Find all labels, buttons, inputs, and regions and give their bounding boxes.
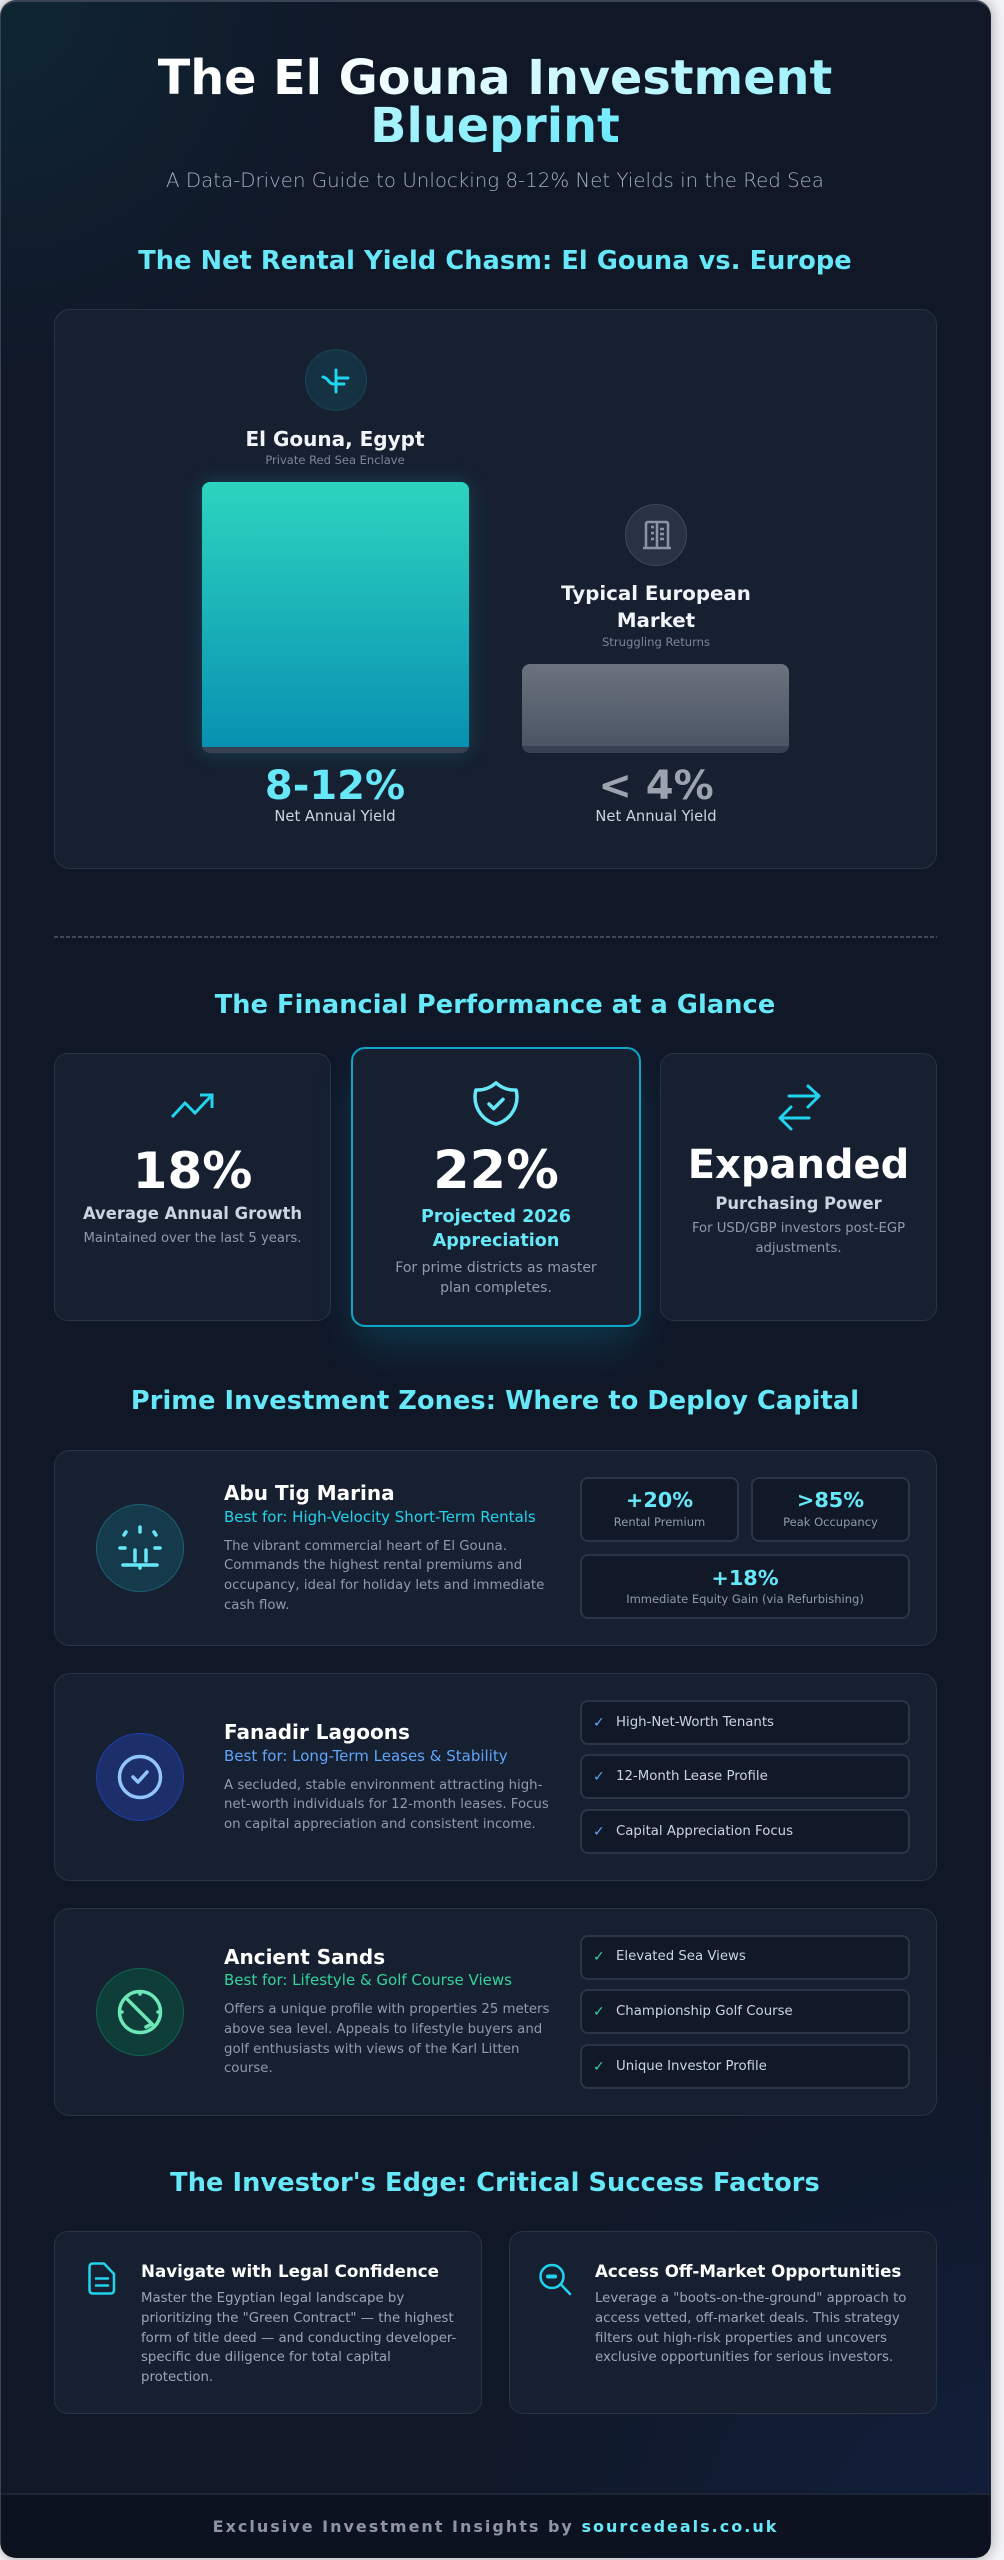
text: off-market: Leverage a "boots-on-the-ground" approach to: [595, 2291, 906, 2306]
stat: peak occupancy: Peak Occupancy: [783, 1515, 878, 1529]
card: expanded purchasing power: [660, 1053, 937, 1321]
panel: Ancient Sands: [54, 1908, 937, 2116]
text: Abu Tig Marina: Abu Tig Marina: [224, 1481, 395, 1505]
icon: golf ball slash: [96, 1968, 184, 2056]
text: legal: [141, 2291, 456, 2385]
description: Offers a unique profile with properties 25 meters: [224, 2002, 549, 2017]
label: El Gouna, Egypt: El Gouna, Egypt: [245, 427, 425, 451]
feature: investor profile: Unique Investor Profile: [616, 2058, 767, 2074]
note: prime districts: plan completes.: [440, 1280, 552, 1296]
icon: check circle: [96, 1733, 184, 1821]
stat: equity gain: [580, 1554, 910, 1619]
value: < 4%: < 4%: [598, 763, 714, 809]
subtitle: A Data-Driven Guide to Unlocking 8-12% Net Yields in the Red Sea: [166, 168, 824, 192]
card: legal confidence: [54, 2231, 482, 2414]
icon: trending up: [171, 1094, 214, 1118]
panel: Fanadir Lagoons: [54, 1673, 937, 1881]
text: off-market: [595, 2291, 906, 2365]
icon: European building: [624, 504, 686, 566]
text: legal: protection.: [141, 2370, 213, 2385]
card: 18% growth: [54, 1053, 331, 1321]
stat: rental premium: Rental Premium: [614, 1515, 705, 1529]
title: The El Gouna Investment: [158, 51, 832, 106]
title: [158, 51, 832, 154]
label: average annual growth: Average Annual Growth: [83, 1204, 302, 1223]
icon: El Gouna plane marker: [304, 349, 366, 411]
feature: investor profile: ✓: [593, 2058, 605, 2074]
feature: lease profile: [580, 1754, 910, 1799]
icon: magnifier: [539, 2264, 572, 2296]
text: Fanadir Lagoons: Fanadir Lagoons: [224, 1720, 410, 1744]
feature: tenants: [580, 1700, 910, 1745]
label: Typical European Market: Market: [617, 608, 695, 632]
sublabel: Private Red Sea Enclave: Private Red Sea Enclave: [265, 453, 405, 467]
heading: prime investment zones: Prime Investment Zones: Where to Deploy Capital: [131, 1386, 859, 1416]
description: course.: [224, 2061, 273, 2076]
description: [224, 2002, 549, 2076]
note: USD/GBP investors: adjustments.: [755, 1241, 842, 1256]
icon: marina: [96, 1504, 184, 1592]
footer text: Exclusive Investment Insights by sourcedeals.co.uk: [213, 2517, 778, 2536]
value: 22%: 22%: [433, 1140, 559, 1201]
stat: rental premium: +20%: [626, 1488, 693, 1512]
panel: Abu Tig Marina: [54, 1450, 937, 1646]
description: above sea level. Appeals to lifestyle buyers and: [224, 2022, 542, 2037]
stat: peak occupancy: [751, 1477, 910, 1542]
description: net-worth individuals for 12-month leases. Focus: [224, 1797, 549, 1812]
feature: sea views: Elevated Sea Views: [616, 1949, 746, 1964]
feature: tenants: High-Net-Worth Tenants: [616, 1714, 774, 1730]
heading: yield chasm: The Net Rental Yield Chasm: El Gouna vs. Europe: [138, 246, 852, 276]
panel: yield comparison: [54, 309, 937, 869]
feature: appreciation: Capital Appreciation Focus: [616, 1824, 793, 1838]
best for: lifestyle: Best for: Lifestyle & Golf Course Views: [224, 1971, 512, 1989]
best for: long-term leases: Best for: Long-Term Leases & Stability: [224, 1747, 508, 1765]
text: off-market: filters out high-risk properties and uncovers: [595, 2331, 887, 2346]
heading: financial performance: The Financial Performance at a Glance: [215, 990, 775, 1020]
feature: lease profile: 12-Month Lease Profile: [616, 1768, 768, 1784]
description: A secluded, stable environment attracting high-: [224, 1778, 542, 1792]
heading: off-market: Access Off-Market Opportunities: [595, 2261, 901, 2281]
text: legal: specific due diligence for total capital: [141, 2350, 391, 2365]
note: prime districts: [395, 1260, 597, 1296]
description: occupancy, ideal for holiday lets and immediate: [224, 1578, 544, 1593]
bar: El Gouna: [202, 482, 469, 753]
feature: golf course: Championship Golf Course: [616, 2004, 793, 2018]
best for: short-term rentals: Best for: High-Velocity Short-Term Rentals: [224, 1508, 536, 1526]
text: off-market: access vetted, off-market deals. This strategy: [595, 2311, 900, 2326]
feature: golf course: [580, 1989, 910, 2034]
icon: shield check: [473, 1081, 519, 1126]
text: legal: Master the Egyptian legal landscape by: [141, 2291, 404, 2306]
feature: investor profile: [580, 2044, 910, 2089]
feature: tenants: ✓: [593, 1714, 605, 1730]
note: maintained: Maintained over the last 5 years.: [84, 1231, 301, 1246]
stat: rental premium: [580, 1477, 739, 1542]
icon: exchange arrows: [778, 1084, 821, 1131]
text: Ancient Sands: Ancient Sands: [224, 1945, 385, 1969]
card: off-market: [509, 2231, 937, 2414]
description: Commands the highest rental premiums and: [224, 1558, 522, 1573]
bar: Europe: [522, 664, 789, 753]
label: Typical European Market: [561, 582, 751, 632]
caption: net annual yield: Net Annual Yield: [274, 808, 396, 825]
value: 18%: 18%: [133, 1142, 252, 1200]
heading: investor's edge: The Investor's Edge: Critical Success Factors: [170, 2168, 820, 2198]
label: projected appreciation: Appreciation: [433, 1231, 559, 1251]
footer: [1, 2493, 990, 2557]
label: purchasing power: Purchasing Power: [715, 1194, 882, 1213]
label: projected appreciation: Projected 2026: [421, 1207, 571, 1227]
text: off-market: exclusive opportunities for serious investors.: [595, 2350, 893, 2365]
card: 22% appreciation (highlighted): [351, 1047, 641, 1327]
stat: peak occupancy: >85%: [797, 1488, 864, 1512]
sublabel: Struggling Returns: Struggling Returns: [602, 635, 710, 649]
feature: sea views: ✓: [593, 1949, 605, 1965]
text: legal: form of title deed — and conducting developer-: [141, 2331, 456, 2346]
value: 8-12%: 8-12%: [265, 763, 405, 809]
description: [224, 1778, 549, 1832]
description: [224, 1538, 544, 1613]
feature: appreciation: [580, 1809, 910, 1854]
text: legal: prioritizing the "Green Contract" — the highest: [141, 2311, 454, 2326]
description: The vibrant commercial heart of El Gouna.: [224, 1538, 507, 1554]
value: Expanded: Expanded: [688, 1142, 909, 1188]
stat: equity gain: +18%: [711, 1566, 779, 1590]
description: on capital appreciation and consistent income.: [224, 1817, 536, 1832]
title: Blueprint: [370, 99, 620, 154]
label: Typical European Market: Typical European: [561, 582, 751, 604]
feature: lease profile: ✓: [593, 1768, 605, 1784]
description: cash flow.: [224, 1598, 289, 1613]
label: projected appreciation: [421, 1207, 571, 1251]
feature: sea views: [580, 1934, 910, 1980]
caption: net annual yield: Net Annual Yield: [595, 808, 717, 825]
feature: golf course: ✓: [593, 2004, 605, 2020]
heading: legal: Navigate with Legal Confidence: [141, 2261, 439, 2281]
feature: appreciation: ✓: [593, 1824, 605, 1840]
stat: equity gain: Immediate Equity Gain (via Refurbishing): [626, 1592, 864, 1606]
description: golf enthusiasts with views of the Karl Litten: [224, 2042, 519, 2057]
note: prime districts: For prime districts as master: [395, 1260, 597, 1276]
icon: document: [88, 2262, 116, 2295]
note: USD/GBP investors: For USD/GBP investors post-EGP: [692, 1221, 905, 1236]
note: USD/GBP investors: [692, 1221, 905, 1256]
